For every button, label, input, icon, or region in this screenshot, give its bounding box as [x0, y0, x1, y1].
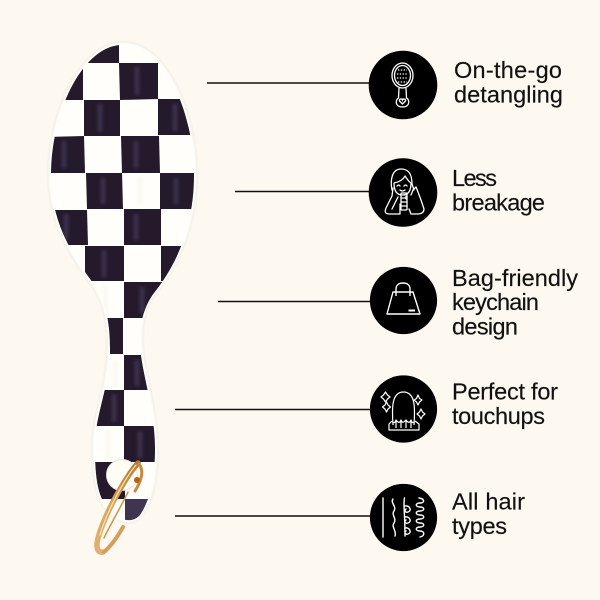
text: bag-friendly: Bag-friendly — [452, 265, 578, 291]
hairbrush — [48, 40, 200, 552]
text: breakage: breakage — [452, 190, 545, 216]
icon: hair types — [370, 484, 437, 551]
text: touchups: touchups — [452, 403, 545, 429]
gold key ring — [97, 463, 142, 552]
icon: mini brush — [369, 51, 437, 119]
text: perfect for: Perfect for — [452, 378, 558, 404]
connector lines — [175, 83, 371, 516]
icon: sparkling hair — [370, 375, 437, 443]
key ring hole — [106, 460, 138, 490]
text: detangling: detangling — [454, 82, 563, 108]
feature: detangling — [369, 51, 562, 119]
text: keychain: keychain — [452, 289, 539, 315]
feature: less breakage — [369, 158, 497, 227]
text: on-the-go: On-the-go — [454, 57, 562, 83]
feature: all hair types — [370, 484, 525, 551]
icon: handbag — [370, 267, 437, 334]
text: design: design — [452, 314, 518, 340]
text: types: types — [452, 513, 507, 539]
icon: woman brushing hair — [369, 158, 437, 227]
checker pattern — [48, 40, 200, 530]
feature: touchups — [370, 375, 558, 443]
text: less: Less — [452, 165, 497, 191]
ring clasp detail — [134, 477, 140, 483]
text: all hair: All hair — [452, 488, 525, 514]
brush body — [48, 42, 197, 523]
feature: bag-friendly — [370, 265, 578, 334]
